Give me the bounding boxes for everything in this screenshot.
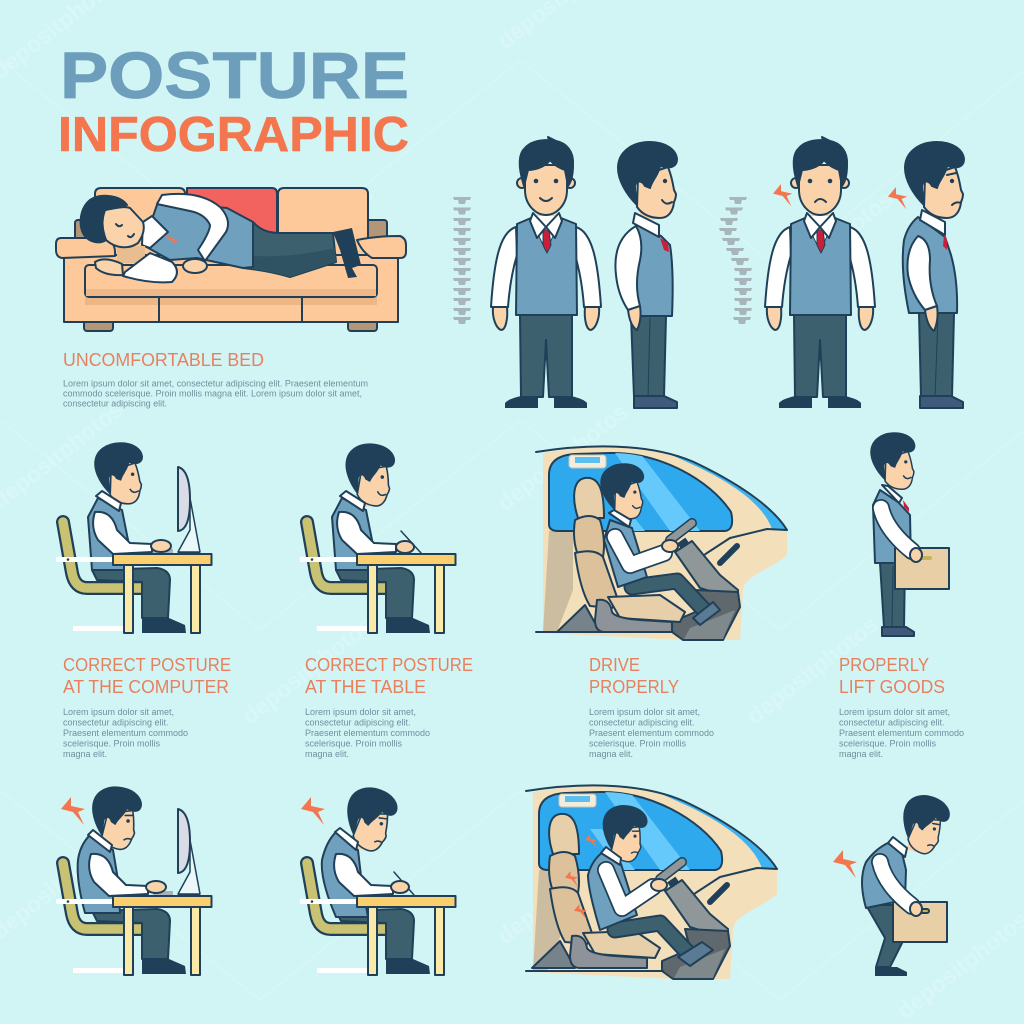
spine: curved	[719, 197, 752, 324]
figure: good posture side	[615, 142, 677, 408]
heading: correct posture at the computer	[63, 655, 231, 697]
illustration: correct posture at the computer	[56, 443, 212, 633]
illustration: bad posture at the computer	[56, 783, 212, 975]
icon: pain bolt	[888, 187, 907, 209]
background watermark: depositphotos	[742, 611, 883, 729]
background watermark: depositphotos	[757, 186, 898, 304]
background watermark: depositphotos	[492, 831, 633, 949]
text block: lift description: consectetur adipiscing elit.	[839, 718, 945, 728]
heading: drive properly: DRIVE	[589, 655, 640, 675]
heading: drive properly	[589, 655, 679, 697]
heading: properly lift goods	[839, 655, 945, 697]
text block: computer description: magna elit.	[63, 749, 107, 759]
text block: lift description	[839, 707, 964, 759]
text block: computer description	[63, 707, 188, 759]
panel: uncomfortable bed sofa illustration	[56, 188, 406, 331]
illustration: drive properly	[536, 446, 787, 640]
text block: uncomfortable bed description: commodo scelerisque. Proin mollis magna elit. Lorem ipsum dolor sit amet,	[63, 388, 362, 398]
heading: properly lift goods: PROPERLY	[839, 655, 929, 675]
sofa	[56, 188, 406, 331]
text block: drive description	[589, 707, 714, 759]
title: INFOGRAPHIC	[58, 108, 409, 162]
icon: pain bolt	[301, 797, 325, 825]
text block: uncomfortable bed description: consectetur adipiscing elit.	[63, 398, 167, 408]
heading: correct posture at the computer: CORRECT POSTURE	[63, 655, 231, 675]
title	[58, 38, 409, 162]
heading: correct posture at the table: CORRECT POSTURE	[305, 655, 473, 675]
text block: computer description: Lorem ipsum dolor sit amet,	[63, 707, 174, 717]
text block: table description: magna elit.	[305, 749, 349, 759]
text block: drive description: Praesent elementum commodo	[589, 728, 714, 738]
text block: drive description: Lorem ipsum dolor sit amet,	[589, 707, 700, 717]
text block: drive description: magna elit.	[589, 749, 633, 759]
illustration: correct posture at the table	[300, 441, 456, 633]
figure: good posture front	[491, 137, 601, 408]
title: POSTURE	[60, 38, 409, 112]
text block: lift description: magna elit.	[839, 749, 883, 759]
text block: table description	[305, 707, 430, 759]
text block: drive description: scelerisque. Proin mollis	[589, 738, 687, 748]
text block: computer description: scelerisque. Proin mollis	[63, 738, 161, 748]
text block: table description: consectetur adipiscing elit.	[305, 718, 411, 728]
heading: correct posture at the table: AT THE TABLE	[305, 677, 426, 697]
icon: pain bolt	[833, 850, 857, 878]
background watermark: depositphotos	[237, 611, 378, 729]
text block: lift description: Lorem ipsum dolor sit amet,	[839, 707, 950, 717]
heading: uncomfortable bed: UNCOMFORTABLE BED	[63, 350, 264, 370]
text block: uncomfortable bed description: Lorem ipsum dolor sit amet, consectetur adipiscing elit. Praesent elementum	[63, 378, 368, 388]
text block: lift description: scelerisque. Proin mollis	[839, 738, 937, 748]
figure: bad posture side	[888, 142, 964, 408]
text block: table description: scelerisque. Proin mollis	[305, 738, 403, 748]
text block: computer description: Praesent elementum commodo	[63, 728, 188, 738]
text block: table description: Praesent elementum commodo	[305, 728, 430, 738]
sleeping man	[81, 194, 361, 282]
illustration: bad lifting posture	[833, 789, 953, 976]
text block: computer description: consectetur adipiscing elit.	[63, 718, 169, 728]
text block: drive description: consectetur adipiscing elit.	[589, 718, 695, 728]
illustration: properly lift goods	[871, 433, 949, 636]
illustration: bad posture at the table	[300, 782, 456, 975]
heading: correct posture at the computer: AT THE COMPUTER	[63, 677, 229, 697]
illustration: bad driving posture	[526, 785, 777, 979]
heading: correct posture at the table	[305, 655, 473, 697]
icon: pain bolt	[773, 184, 792, 206]
text block: uncomfortable bed description	[63, 378, 368, 408]
heading: drive properly: PROPERLY	[589, 677, 679, 697]
text block: table description: Lorem ipsum dolor sit amet,	[305, 707, 416, 717]
heading: properly lift goods: LIFT GOODS	[839, 677, 945, 697]
figure: bad posture front	[765, 137, 875, 408]
background watermark: depositphotos	[237, 181, 378, 299]
background watermark: depositphotos	[492, 398, 633, 516]
spine: straight	[453, 197, 471, 324]
text block: lift description: Praesent elementum commodo	[839, 728, 964, 738]
icon: pain bolts	[565, 834, 597, 919]
icon: pain bolt	[61, 797, 85, 825]
